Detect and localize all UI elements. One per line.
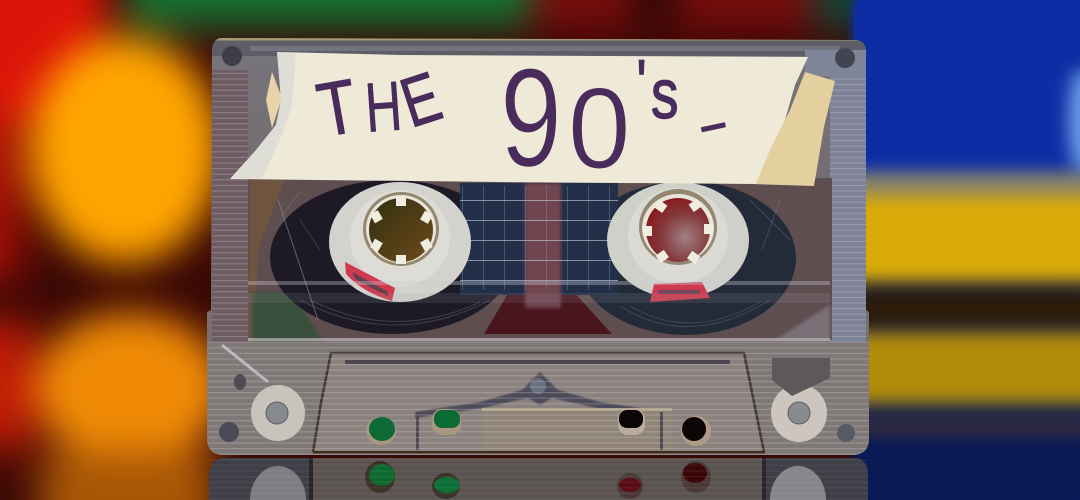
right hub	[607, 182, 749, 302]
hole 1 green	[366, 417, 396, 445]
T shaped moulding	[415, 372, 665, 418]
tape front	[230, 52, 808, 184]
masking tape label	[230, 39, 835, 196]
tape pack wind arcs and scratches	[278, 192, 790, 327]
cassette body	[207, 38, 869, 455]
centre maroon	[484, 290, 612, 334]
window highlights	[248, 281, 830, 285]
handwriting: s	[651, 56, 678, 134]
handwriting: T	[311, 63, 363, 153]
head panel trapezoid	[313, 353, 764, 452]
lower cassette section	[207, 342, 869, 455]
reflection of cassette on the table	[209, 458, 868, 500]
tape grid	[460, 183, 618, 308]
left hub	[329, 182, 471, 302]
handwriting: 0	[568, 65, 630, 193]
corner screw bottom right	[837, 424, 855, 442]
tape backing left	[266, 72, 282, 128]
green tint seen through window	[252, 292, 322, 340]
handwriting: 9	[500, 39, 562, 196]
corner screw top right	[835, 48, 855, 68]
left pad	[251, 385, 305, 441]
handwriting	[311, 39, 734, 196]
right tape pack	[576, 181, 796, 335]
corner screw top left	[222, 46, 242, 66]
left tape pack	[270, 180, 514, 334]
side ribs right	[830, 70, 866, 350]
side ribs left	[212, 70, 248, 350]
handwriting: E	[392, 57, 450, 143]
handwriting: '	[636, 46, 647, 121]
handwriting: -	[691, 92, 734, 155]
hole 4 black	[681, 416, 711, 446]
hole 3 black	[618, 409, 645, 435]
handwriting: H	[363, 66, 404, 147]
right pad	[771, 384, 827, 442]
corner screw bottom left	[219, 422, 239, 442]
tape backing right	[752, 72, 835, 186]
hole 2 green	[432, 409, 461, 435]
window with tape reels	[248, 178, 832, 341]
